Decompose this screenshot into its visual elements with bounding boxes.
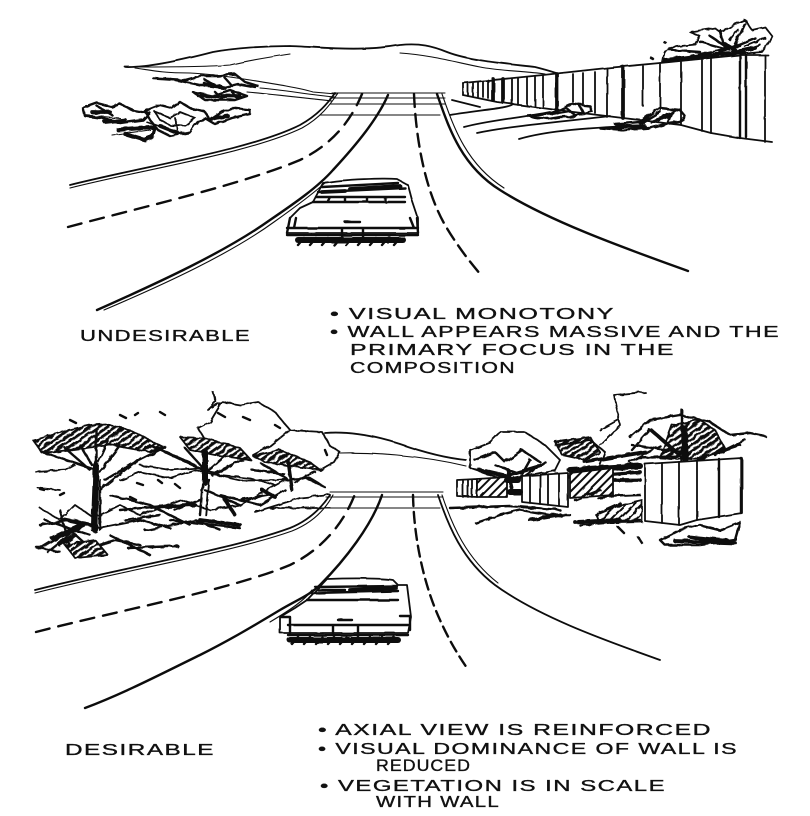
notes: desirable: • VEGETATION IS IN SCALE [320, 778, 666, 795]
notes: desirable: REDUCED [376, 756, 471, 775]
label: undesirable: UNDESIRABLE [80, 328, 251, 345]
background tree outline [36, 392, 340, 490]
panel: undesirable highway scene [68, 20, 772, 310]
noise walls [457, 458, 742, 525]
left row of trees [33, 424, 320, 530]
notes: desirable: • VISUAL DOMINANCE OF WALL IS [318, 741, 738, 758]
notes: desirable: WITH WALL [376, 794, 500, 811]
right foreground shrubs [450, 490, 740, 545]
notes: undesirable: • VISUAL MONOTONY [330, 306, 615, 323]
road centre solid line [97, 95, 388, 310]
distant hills [125, 44, 556, 101]
foreground ground lines by the wall [450, 100, 645, 139]
left lane dashed line [68, 94, 362, 227]
notes: undesirable: COMPOSITION [350, 360, 516, 377]
centre dashed line [414, 94, 481, 275]
left lane dashed line [36, 494, 355, 632]
car [280, 578, 411, 644]
label: desirable: DESIRABLE [65, 742, 215, 759]
car [287, 179, 418, 245]
road horizon lines [318, 492, 443, 508]
wall-side shrubs [528, 104, 685, 130]
notes: undesirable: • WALL APPEARS MASSIVE AND THE [330, 324, 780, 341]
left roadside shrubs [83, 74, 258, 140]
road left edge [70, 93, 335, 185]
right tree crowns [470, 392, 765, 488]
road right edge [437, 94, 688, 271]
distant hills [325, 433, 466, 466]
notes: undesirable: PRIMARY FOCUS IN THE [350, 342, 675, 359]
notes: desirable [318, 722, 738, 811]
road left edge [35, 495, 330, 590]
notes: desirable: • AXIAL VIEW IS REINFORCED [318, 722, 712, 739]
noise wall [463, 55, 772, 142]
road horizon lines [320, 93, 445, 115]
leaf dashes [40, 412, 327, 500]
notes: undesirable [330, 306, 780, 377]
road right edge [438, 495, 660, 660]
tree crown behind the wall [651, 20, 772, 62]
panel: desirable highway scene [33, 392, 765, 708]
centre dashed line [413, 495, 467, 668]
left understory shrubs [36, 470, 330, 558]
road centre solid line [85, 495, 382, 708]
